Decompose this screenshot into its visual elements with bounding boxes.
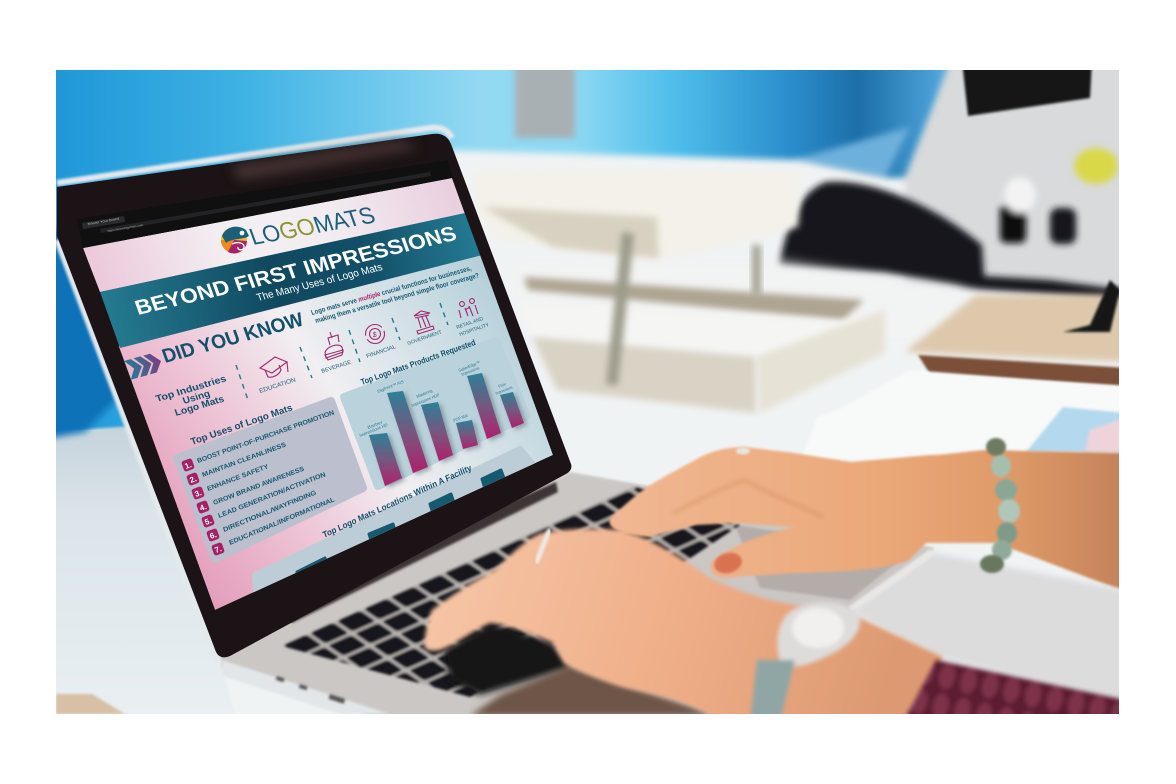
number badges: 7. (214, 544, 223, 555)
browser tab (82, 216, 125, 229)
lower tray white layer (650, 253, 964, 290)
number badges: 5. (204, 516, 213, 527)
page background lower (118, 255, 553, 610)
black telephone (779, 182, 1125, 300)
bar labels: Barber (367, 419, 384, 430)
list of uses: ENHANCE SAFETY (206, 463, 270, 493)
keyboard (282, 486, 740, 697)
top industries heading: Top Industries (154, 373, 228, 405)
left desk (56, 425, 226, 694)
bar labels: Impressions (461, 365, 480, 377)
intro text: Logo mats serve multiple crucial functions for businesses, (310, 265, 473, 317)
number badges: 4. (199, 502, 208, 513)
intro text: making them a versatile tool beyond simple floor coverage? (314, 272, 480, 325)
label education: EDUCATION (258, 377, 297, 395)
header banner (100, 213, 482, 348)
logo wordmark: LOGOMATS (246, 202, 379, 251)
dashed dividers (236, 303, 448, 400)
blue wall (56, 70, 952, 430)
title: BEYOND FIRST IMPRESSIONS (132, 222, 460, 320)
panel heading: Top Uses of Logo Mats (189, 403, 294, 448)
ring (736, 448, 750, 454)
jade bracelet (980, 438, 1020, 573)
thumb nail (712, 550, 744, 576)
list of uses (196, 409, 336, 547)
bar labels: SuperEdge™ (458, 360, 481, 373)
deck silver edge (850, 552, 932, 610)
number badges (181, 458, 225, 556)
icon: government (414, 311, 434, 334)
finger crease (673, 480, 823, 517)
browser window chrome: https://www.logomats.com (107, 223, 144, 233)
laptop (57, 128, 935, 720)
chevron icon (124, 352, 164, 380)
wood surface (905, 295, 1130, 362)
white desk background (226, 146, 1119, 714)
bar labels: Floor (498, 381, 507, 389)
icon: financial: $ (373, 332, 377, 339)
list of uses: EDUCATIONAL/INFORMATIONAL (228, 496, 336, 547)
front edge highlight (222, 660, 390, 714)
black keys near fingers (444, 623, 572, 695)
black camera object (1000, 177, 1076, 244)
lower tray tan band (524, 277, 864, 320)
label beverage: BEVERAGE (321, 360, 352, 375)
bar labels: Impressions HD (359, 422, 388, 438)
panel: top logo mats products requested (344, 337, 527, 486)
ring band (537, 531, 549, 561)
label government: GOVERNMENT (407, 330, 443, 347)
shadow under hand (470, 665, 719, 716)
far hand and arm (609, 438, 1125, 590)
second tray post (752, 245, 761, 295)
bar labels: POP Mat (453, 412, 469, 423)
tray post (606, 232, 634, 385)
grey desk shadow right (850, 552, 1125, 704)
dark monitor (961, 70, 1094, 118)
icon: beverage (325, 332, 343, 360)
browser window chrome (77, 160, 453, 249)
paper documents (926, 370, 1119, 388)
list of uses: DIRECTIONAL/WAYFINDING (222, 489, 317, 534)
did you know heading: DID YOU KNOW (159, 309, 307, 368)
bar labels: Impressions (495, 385, 513, 396)
wrist watch (750, 602, 860, 722)
lower tray front (532, 337, 756, 413)
list of uses: LEAD GENERATION/ACTIVATION (217, 471, 327, 520)
address bar (100, 172, 431, 233)
bar labels: Impressions HDP (411, 392, 440, 408)
icon: graduation cap (260, 357, 288, 377)
blue chart triangle (1026, 407, 1125, 452)
tan object bottom left (56, 694, 125, 714)
pale wall wedge (793, 127, 910, 178)
top paper tray (474, 170, 802, 262)
number badges: 3. (194, 488, 203, 499)
bar labels: Mastering (416, 388, 434, 399)
grey pillar (515, 60, 575, 138)
logo chameleon icon (221, 227, 249, 253)
panel: top logo mats locations within a facility (256, 450, 560, 640)
panel heading: Top Logo Mats Locations Within A Facility (321, 462, 473, 540)
front edge ports (276, 676, 345, 704)
keyboard deck (220, 472, 935, 720)
list of uses: MAINTAIN CLEANLINESS (201, 441, 288, 479)
top industries heading: Logo Mats (173, 394, 226, 419)
yellow object (1074, 148, 1118, 184)
lid bezel (57, 134, 571, 657)
right office shelf (901, 70, 1119, 290)
deck right panel (735, 525, 910, 600)
number badges: 2. (189, 474, 198, 485)
icon: retail and hospitality (459, 299, 478, 318)
number badges: 1. (184, 460, 193, 471)
location tabs (297, 470, 510, 605)
top industries heading (154, 373, 228, 419)
number badges: 6. (209, 530, 218, 541)
label retail and hospitality: RETAIL AND (456, 316, 485, 331)
browser window chrome: Master Your Brand (87, 217, 120, 226)
list of uses: BOOST POINT-OF-PURCHASE PROMOTION (196, 409, 336, 465)
blurred office objects (56, 70, 1119, 714)
left blue strip (56, 228, 116, 443)
bezel reddish highlight (230, 140, 420, 180)
lower tray white rim (794, 316, 844, 323)
logo (221, 202, 379, 253)
icon: financial (366, 324, 384, 344)
panel: top uses of logo mats (177, 401, 363, 559)
list of uses: GROW BRAND AWARENESS (212, 465, 306, 507)
label retail and hospitality: HOSPITALITY (459, 322, 491, 338)
subtitle: The Many Uses of Logo Mats (255, 262, 384, 304)
black stand (1063, 280, 1120, 332)
dark wood strip (918, 355, 1130, 386)
near hand and arm (424, 529, 1125, 722)
photo background: blurred office (56, 70, 1119, 714)
hinge strip (268, 482, 558, 623)
photo scene: laptop showing infographic (56, 70, 1119, 714)
bar chart (369, 373, 524, 486)
label retail and hospitality (456, 316, 491, 338)
burgundy bracelet (903, 660, 1125, 722)
bar labels (359, 360, 513, 438)
page background upper (83, 178, 465, 292)
lid silver edge (56, 123, 456, 524)
label financial: FINANCIAL (366, 344, 397, 360)
bar labels: DigiPrint™ AIS (377, 379, 405, 394)
top industries heading: Using (181, 388, 212, 407)
top tray front face (482, 207, 659, 260)
panel heading: Top Logo Mats Products Requested (359, 337, 477, 387)
laptop screen: infographic page (83, 178, 560, 640)
